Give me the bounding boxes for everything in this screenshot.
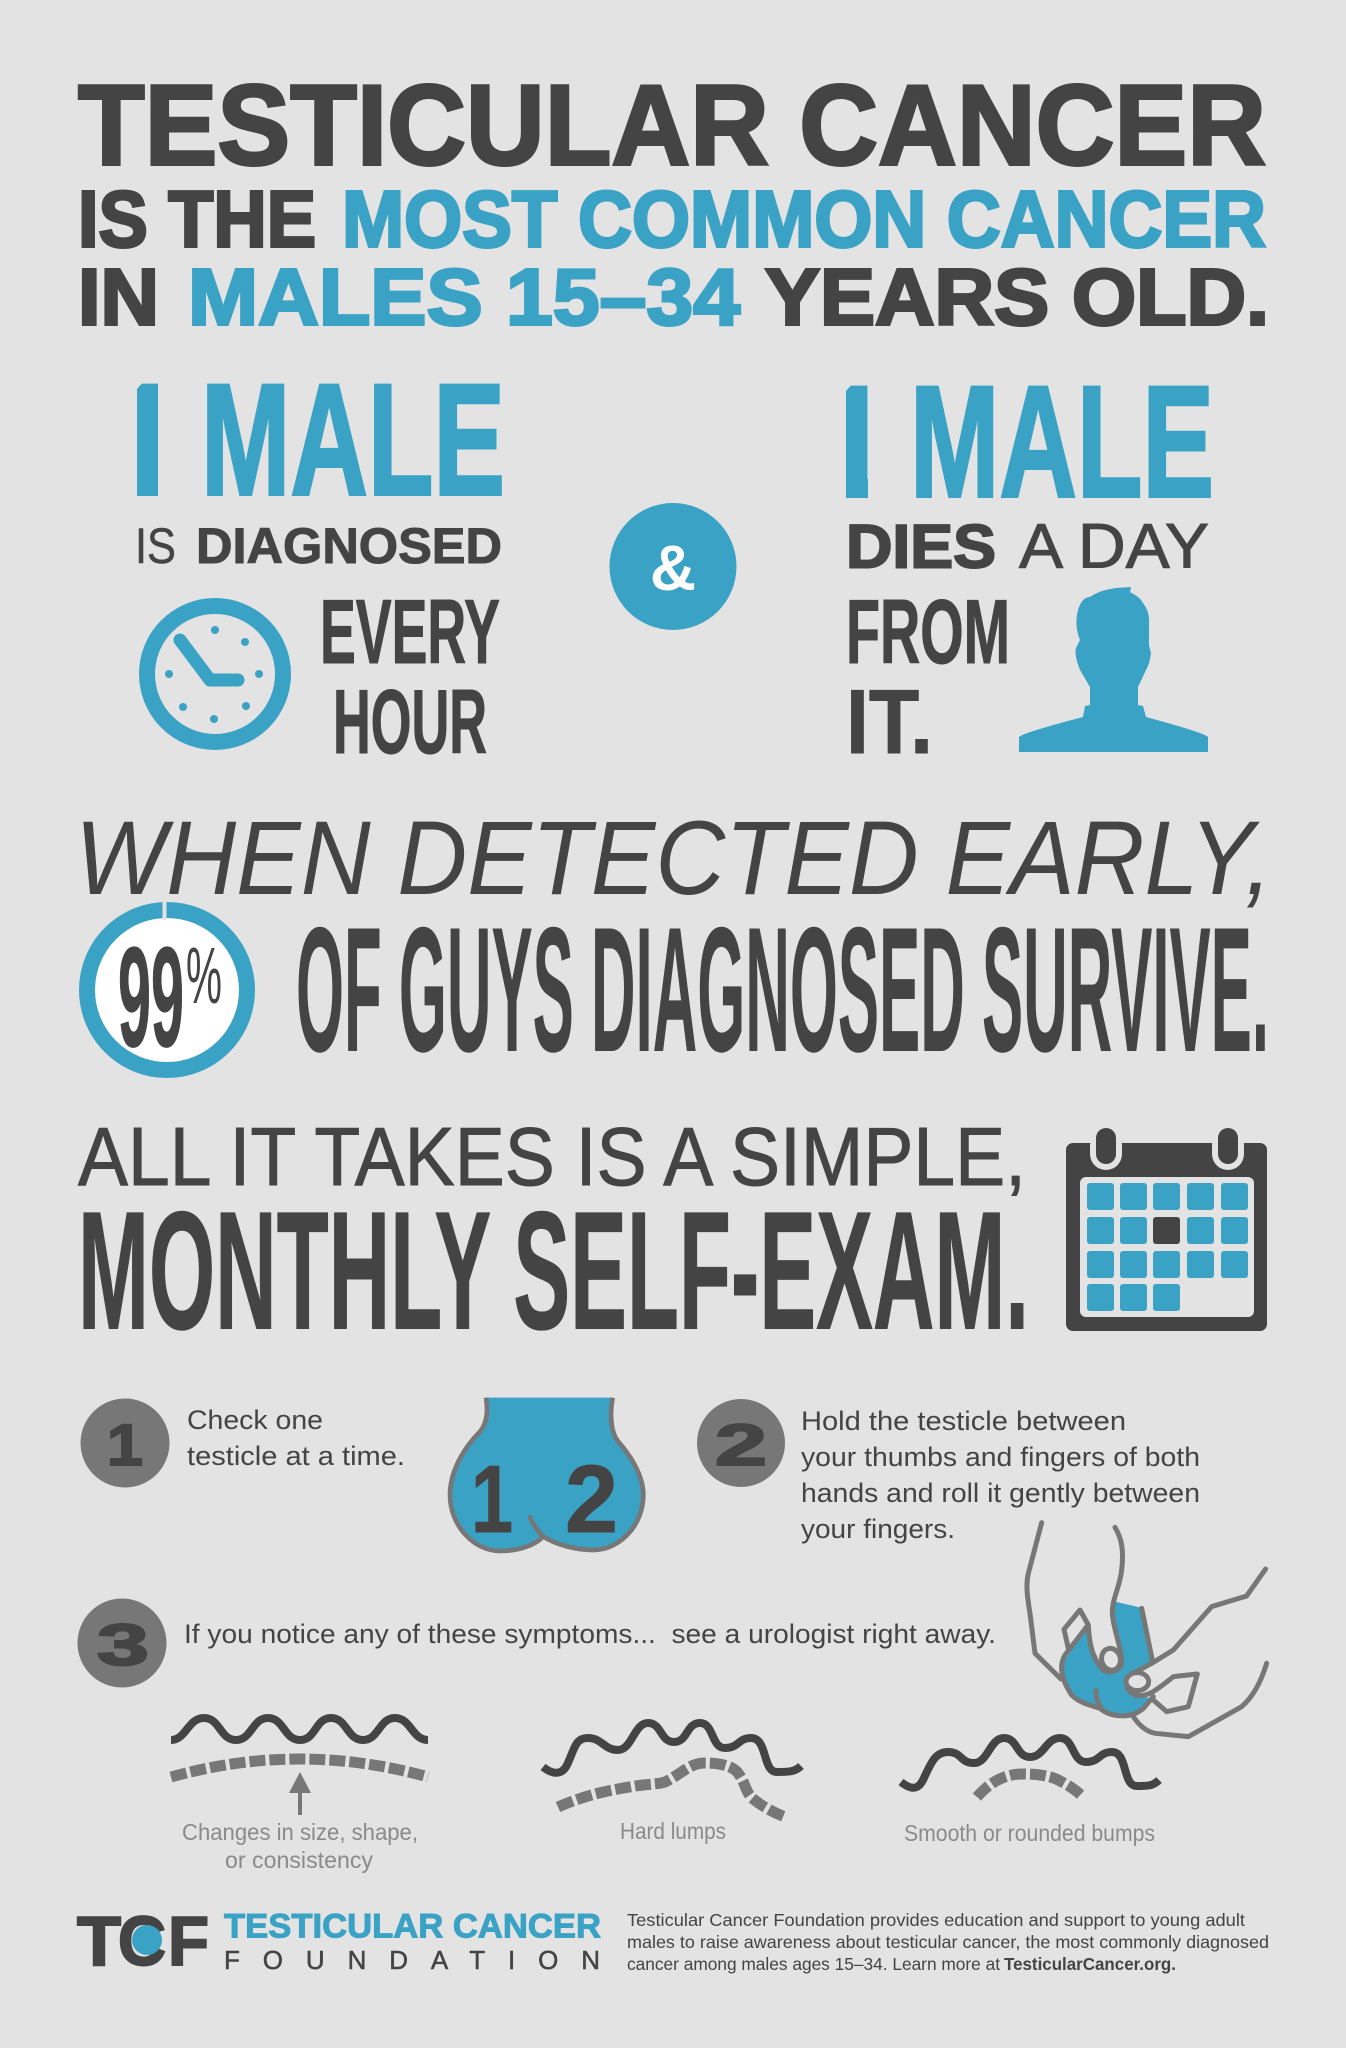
caption: changes: [182, 1819, 418, 1873]
text: step 2: your thumbs and fingers of both: [801, 1442, 1200, 1472]
step 1: [80, 1398, 405, 1488]
title: TESTICULAR CANCER: [78, 62, 1266, 190]
heading: 1 male left: 1: [98, 350, 186, 528]
text: every hour: EVERY: [320, 582, 500, 683]
logo mark: TCF: C: [118, 1902, 166, 1980]
step 3: [78, 1598, 996, 1688]
icon: ampersand circle: [610, 503, 736, 630]
title: IN: [78, 252, 159, 342]
heading: 1 male left: MALE: [201, 350, 505, 528]
text: foundation description: males to raise awareness about testicular cancer, the most commonly diagnosed: [627, 1932, 1269, 1952]
text: from it: FROM: [846, 582, 1010, 683]
step 2: [697, 1399, 1200, 1544]
text: dies a day: DIES: [846, 512, 996, 580]
caption: changes: or consistency: [225, 1847, 373, 1873]
logo: testicular cancer foundation: [77, 1902, 601, 1980]
text: foundation description: [627, 1910, 1269, 1974]
text: step 1: Check one: [187, 1405, 323, 1435]
icon: clock: [147, 606, 283, 742]
title: MALES 15–34: [188, 252, 741, 342]
text: from it: IT.: [846, 672, 933, 773]
icon: ampersand circle: &: [650, 532, 696, 604]
text: step 3: If you notice any of these symptoms... see a urologist right away.: [184, 1619, 996, 1649]
text: foundation description: cancer among males ages 15–34. Learn more at: [627, 1954, 1000, 1974]
text: step 2: your fingers.: [801, 1514, 955, 1544]
icon: testicles diagram: 2: [565, 1446, 618, 1553]
arrow: [289, 1772, 311, 1815]
icon: number 1 badge: [80, 1398, 170, 1488]
diagram: smooth bumps: [901, 1738, 1159, 1846]
icon: hands rolling testicle: [1027, 1523, 1267, 1737]
logo wordmark: FOUNDATION: [224, 1945, 600, 1975]
icon: number 1 badge: 1: [107, 1413, 143, 1478]
text: dies a day: A DAY: [1019, 512, 1209, 582]
panel: one male dies a day: [846, 386, 1211, 754]
icon: person silhouette: [1019, 587, 1208, 752]
icon: number 2 badge: 2: [715, 1413, 767, 1478]
text: dies a day: [846, 512, 1209, 582]
title: YEARS OLD.: [765, 252, 1269, 342]
text: from it: [846, 582, 1010, 773]
text: foundation description: TesticularCancer.org.: [1004, 1954, 1176, 1974]
heading: 1 male right: [846, 386, 1211, 498]
text: is diagnosed: IS: [135, 518, 176, 574]
logo mark: TCF: [77, 1902, 209, 1980]
icon: number 2 badge: [697, 1399, 785, 1487]
heading: when detected early: WHEN DETECTED EARLY,: [75, 800, 1272, 917]
caption: changes: Changes in size, shape,: [182, 1819, 418, 1845]
text: step 2: [801, 1406, 1200, 1544]
logo wordmark: [224, 1908, 601, 1975]
text: step 2: Hold the testicle between: [801, 1406, 1126, 1436]
text: every hour: HOUR: [333, 672, 487, 773]
chart: 99 percent ring: %: [186, 931, 222, 1020]
title: [78, 62, 1269, 342]
text: every hour: [320, 582, 500, 773]
panel: one male diagnosed every hour: [137, 384, 502, 754]
diagram: hard lumps: [543, 1723, 801, 1844]
heading: 1 male left: [137, 384, 502, 496]
icon: calendar: [1066, 1128, 1267, 1331]
icon: testicles diagram: 1: [471, 1446, 513, 1553]
icon: number 3 badge: [78, 1598, 166, 1688]
text: step 1: testicle at a time.: [187, 1441, 405, 1471]
logo wordmark: TESTICULAR CANCER: [224, 1908, 601, 1946]
chart: 99 percent ring: 99: [118, 918, 184, 1077]
text: step 2: hands and roll it gently between: [801, 1478, 1200, 1508]
caption: hard lumps: Hard lumps: [620, 1818, 726, 1844]
title: IS THE: [78, 174, 316, 264]
chart: 99 percent ring: [87, 900, 247, 1077]
diagram: changes in size: [171, 1718, 428, 1873]
text: step 1: [187, 1405, 405, 1471]
heading: all it takes is a simple: ALL IT TAKES IS A SIMPLE,: [78, 1110, 1026, 1203]
logo mark: TCF: T: [77, 1902, 121, 1980]
text: foundation description: Testicular Cancer Foundation provides education and support to young adult: [627, 1910, 1245, 1930]
title: MOST COMMON CANCER: [342, 174, 1266, 264]
heading: 1 male right: 1: [807, 352, 895, 530]
icon: testicles diagram: [450, 1398, 643, 1553]
text: is diagnosed: DIAGNOSED: [196, 518, 502, 574]
logo mark: TCF: F: [168, 1902, 209, 1980]
caption: smooth bumps: Smooth or rounded bumps: [904, 1820, 1155, 1846]
icon: number 3 badge: 3: [97, 1613, 149, 1678]
